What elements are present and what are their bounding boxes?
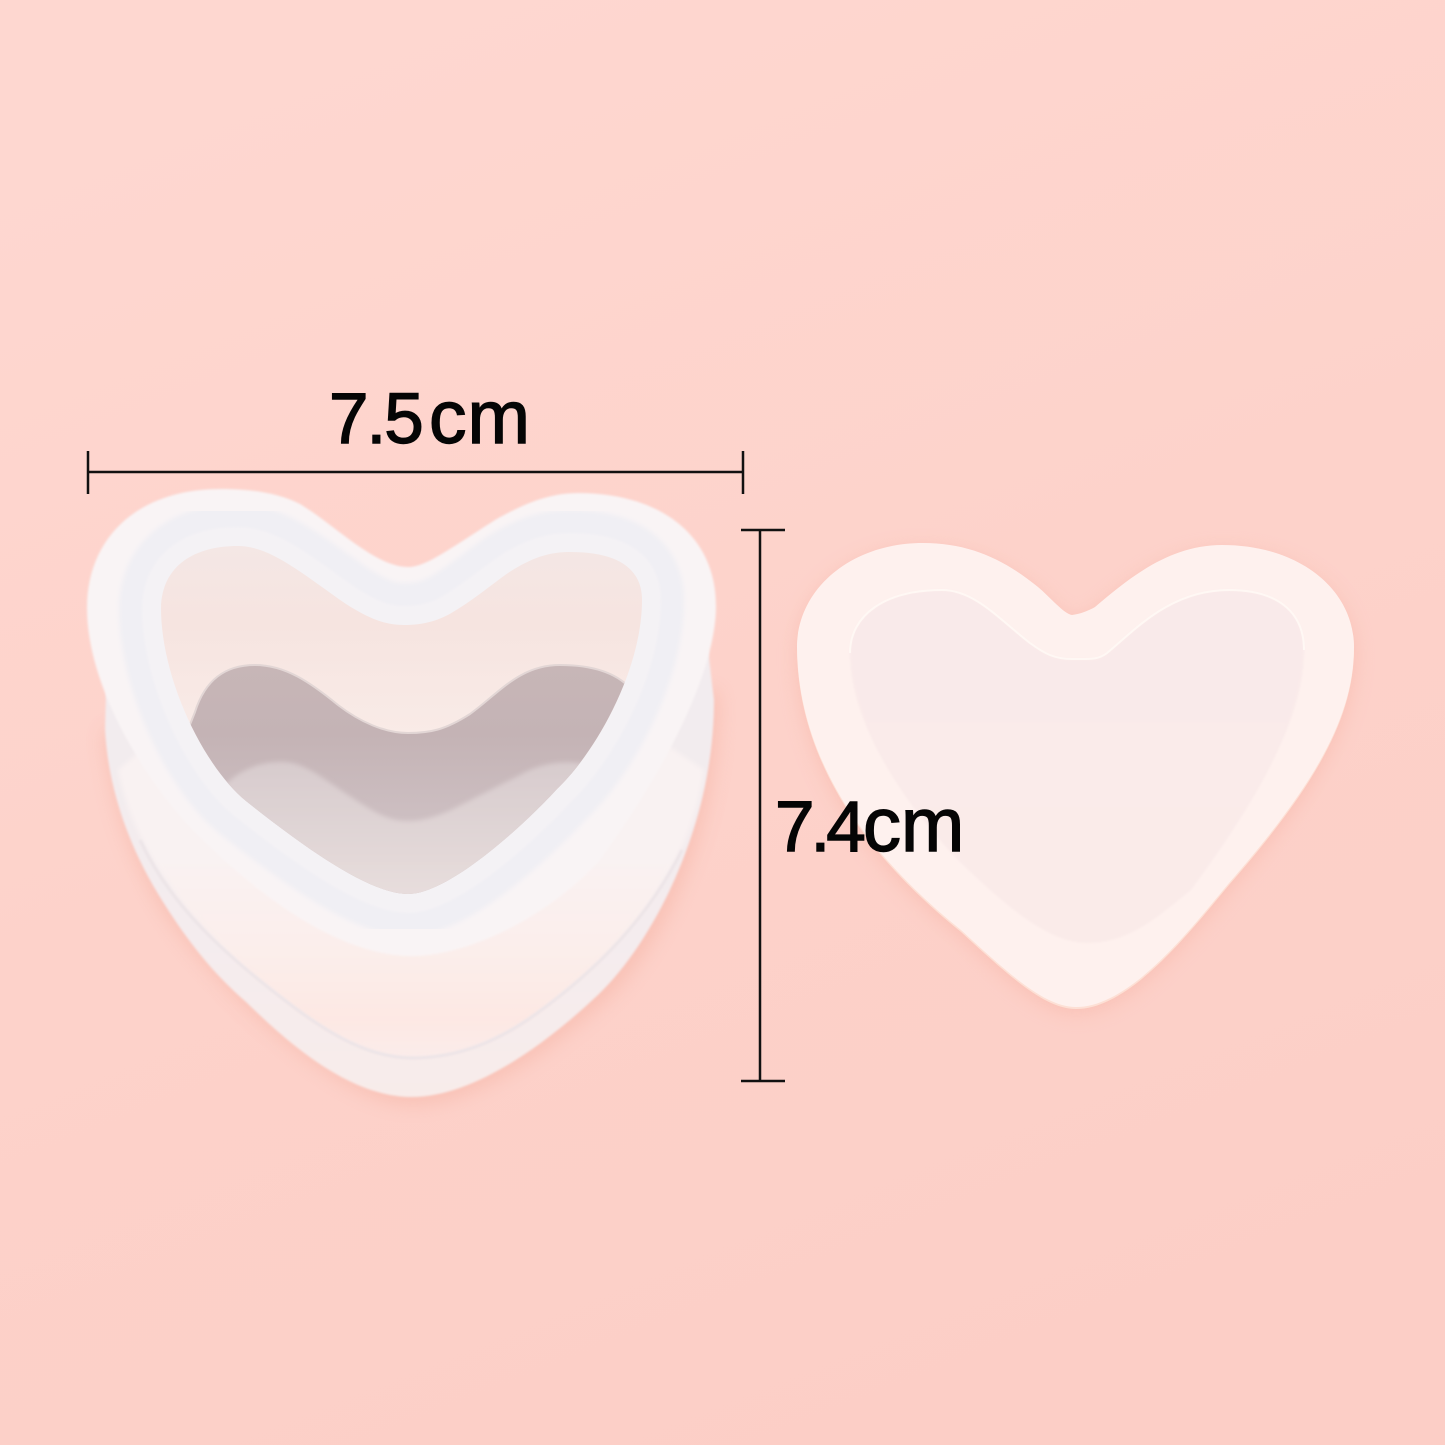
height dimension <box>741 530 964 1081</box>
mold side wall inner zone <box>118 700 704 1058</box>
rim bands <box>161 546 642 894</box>
mold outer side wall <box>105 650 714 1097</box>
mold cavity wall <box>161 546 642 894</box>
mold shadow <box>104 690 718 1104</box>
floor lighter reflection <box>228 761 580 894</box>
side wall groove <box>140 840 682 1058</box>
rim blue band <box>161 546 642 894</box>
cavity floor <box>190 664 625 894</box>
lid recessed panel <box>850 590 1304 943</box>
width label: cm <box>429 375 531 459</box>
width dimension <box>88 375 743 494</box>
floor dark area <box>190 664 625 894</box>
height measure line <box>741 530 785 1081</box>
mold top rim <box>87 489 716 956</box>
height label: 7.4 <box>775 788 862 867</box>
rim inner band <box>161 546 642 894</box>
lid panel highlight <box>850 590 1304 659</box>
lid outer shape <box>797 543 1354 1007</box>
height label: cm <box>863 783 964 868</box>
lid thickness edge <box>797 545 1354 1009</box>
large heart mold <box>87 489 718 1104</box>
width measure line <box>88 451 743 494</box>
lid shadow <box>797 549 1354 1013</box>
width label: 7.5 <box>329 380 422 459</box>
small heart lid <box>797 543 1354 1013</box>
